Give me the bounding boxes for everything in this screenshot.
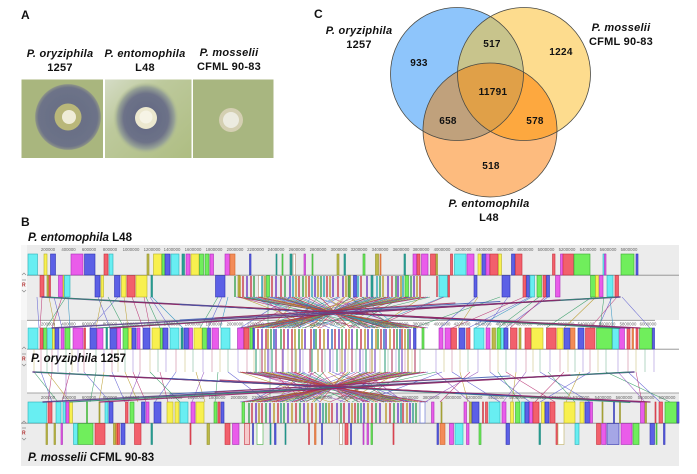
track icons: R <box>22 356 26 362</box>
heading: P. mosselii CFML 90-83: P. mosselii <box>200 47 259 59</box>
Venn counts: 658 <box>439 116 457 127</box>
heading: P. entomophila L48: P. entomophila <box>105 48 185 60</box>
track 3 ruler: 3800000 <box>423 395 440 400</box>
track 3 ruler: 3400000 <box>381 395 398 400</box>
track 1 ruler: 3800000 <box>413 247 430 252</box>
track 3 forward blocks <box>28 402 679 423</box>
track 3 narrow blocks <box>249 403 416 423</box>
track 2 ruler: 5200000 <box>558 322 575 326</box>
track 1 ruler: 600000 <box>82 247 97 252</box>
track 1 ruler: 2000000 <box>227 247 244 252</box>
track 2 ruler: 6000000 <box>640 322 657 326</box>
track 3 ruler: 4400000 <box>488 395 505 400</box>
Venn label: P. oryziphila 1257: 1257 <box>346 39 372 51</box>
panel label C: C <box>314 7 323 21</box>
track 2 ruler: 3600000 <box>392 322 409 326</box>
label: P. mosselii CFML 90-83: P. mosselii CFML 90-83 <box>28 452 154 464</box>
track 1 ruler: 5000000 <box>538 247 555 252</box>
track 3 ruler: 2800000 <box>316 395 333 400</box>
track 3 ruler: 2000000 <box>231 395 248 400</box>
track 2 ruler: 1200000 <box>144 322 161 326</box>
track 2 ruler: 1800000 <box>206 322 223 326</box>
track 1 ruler: 4600000 <box>497 247 514 252</box>
track 1 ruler: 1800000 <box>206 247 223 252</box>
track 3 ruler: 1000000 <box>123 395 140 400</box>
track 2 ruler: 5000000 <box>537 322 554 326</box>
track 2 narrow blocks <box>258 329 410 349</box>
track 2 ruler: 600000 <box>82 322 97 326</box>
track 3 ruler: 4600000 <box>509 395 526 400</box>
link bundles between tracks 2 and 3 <box>33 372 650 402</box>
label: P. oryziphila 1257: P. oryziphila 1257 <box>31 353 126 365</box>
track icons: R <box>22 282 26 288</box>
track icons <box>22 273 26 440</box>
track 2 ruler: 4200000 <box>454 322 471 326</box>
track 2 pale link lines <box>34 349 654 372</box>
track 1 ruler: 1600000 <box>185 247 202 252</box>
track 2 ruler: 2000000 <box>227 322 244 326</box>
track 2 ruler: 1400000 <box>164 322 181 326</box>
track 3 ruler: 4200000 <box>466 395 483 400</box>
track 1 ruler: 4800000 <box>517 247 534 252</box>
track 1 ruler: 3600000 <box>393 247 410 252</box>
track 3 ruler: 1600000 <box>188 395 205 400</box>
plate: P. mosselii <box>193 80 274 158</box>
track 1 ruler: 3400000 <box>372 247 389 252</box>
track 1 ruler: 5800000 <box>621 247 638 252</box>
track 3 ruler: 5800000 <box>638 395 655 400</box>
track 2 ruler: 4400000 <box>475 322 492 326</box>
track 3 ruler: 1400000 <box>166 395 183 400</box>
track 2 ruler: 1600000 <box>185 322 202 326</box>
track 2 ruler: 2800000 <box>310 322 327 326</box>
track 2 darker central strips <box>256 349 415 372</box>
track 3 ruler: 3000000 <box>338 395 355 400</box>
track 2 ruler: 4600000 <box>496 322 513 326</box>
track 1 ruler: 1200000 <box>144 247 161 252</box>
track 2 blocks <box>28 328 654 349</box>
track 1 forward blocks <box>28 254 638 275</box>
panel label B: B <box>21 215 30 229</box>
Venn counts: 1224 <box>549 47 573 58</box>
panel label A: A <box>21 8 30 22</box>
Venn label: P. mosselii CFML 90-83: P. mosselii <box>592 22 651 34</box>
panel C: Venn diagram <box>326 8 653 224</box>
track 3 ruler: 5000000 <box>552 395 569 400</box>
track 2 ruler: 2200000 <box>247 322 264 326</box>
track 1 ruler: 4400000 <box>476 247 493 252</box>
track 1 ruler: 2200000 <box>247 247 264 252</box>
Venn counts: 11791 <box>479 87 508 98</box>
Venn counts: 517 <box>483 39 501 50</box>
Venn counts: 518 <box>482 161 500 172</box>
track 2 ruler: 5800000 <box>620 322 637 326</box>
track 1 narrow reverse blocks <box>235 276 437 297</box>
heading: P. oryziphila 1257: P. oryziphila <box>27 48 93 60</box>
link bundles between tracks 1 and 2 <box>42 297 640 328</box>
track 1 ruler: 3200000 <box>351 247 368 252</box>
track 3 ruler: 3600000 <box>402 395 419 400</box>
panel A: inhibition zone plates <box>22 47 274 158</box>
link lines between tracks 1 and 2 <box>37 297 650 328</box>
Venn label: P. entomophila L48: P. entomophila <box>449 198 529 210</box>
track 1 reverse blocks <box>40 276 618 297</box>
plate: P. entomophila <box>105 80 192 158</box>
track 3 ruler: 2600000 <box>295 395 312 400</box>
Venn label: P. entomophila L48: L48 <box>479 212 499 224</box>
track 3 ruler: 2400000 <box>273 395 290 400</box>
track 1 ruler: 200000 <box>41 247 56 252</box>
track 1 ruler: 3000000 <box>331 247 348 252</box>
track 2 ruler: 1000000 <box>123 322 140 326</box>
track 3 ruler: 5600000 <box>616 395 633 400</box>
track 2 ruler: 3000000 <box>330 322 347 326</box>
Venn label: P. mosselii CFML 90-83: CFML 90-83 <box>589 36 653 48</box>
track 2 ruler: 5400000 <box>578 322 595 326</box>
track 1 ruler: 5400000 <box>580 247 597 252</box>
track 2 ruler: 800000 <box>103 322 118 326</box>
Venn label: P. oryziphila 1257: P. oryziphila <box>326 25 392 37</box>
track 3 ruler: 3200000 <box>359 395 376 400</box>
track 2 ruler: 5600000 <box>599 322 616 326</box>
track 3 ruler: 4000000 <box>445 395 462 400</box>
panel B: genome alignment <box>21 232 679 466</box>
track 3 ruler: 800000 <box>103 395 118 400</box>
alignment background tracks <box>21 245 679 466</box>
track 1 ruler: 2400000 <box>268 247 285 252</box>
Venn counts: 933 <box>410 58 428 69</box>
track 2 ruler: 3200000 <box>351 322 368 326</box>
track 1 ruler: 400000 <box>61 247 76 252</box>
track 2 ruler: 200000 <box>41 322 56 326</box>
track 1 ruler: 1000000 <box>123 247 140 252</box>
track 1 ruler: 4200000 <box>455 247 472 252</box>
track 3 ruler: 200000 <box>41 395 56 400</box>
plate: P. oryziphila <box>22 80 103 158</box>
track 1 ruler: 2800000 <box>310 247 327 252</box>
track 1 ruler: 5600000 <box>600 247 617 252</box>
track 3 ruler: 1800000 <box>209 395 226 400</box>
heading: P. mosselii CFML 90-83: CFML 90-83 <box>197 61 261 73</box>
link lines between tracks 2 and 3 <box>34 372 670 402</box>
track 3 ruler: 600000 <box>82 395 97 400</box>
track 1 ruler: 5200000 <box>559 247 576 252</box>
track 3 ruler: 4800000 <box>530 395 547 400</box>
Venn counts: 578 <box>526 116 544 127</box>
track 2 ruler: 3400000 <box>372 322 389 326</box>
track 1 ruler: 800000 <box>103 247 118 252</box>
track 2 ruler: 2400000 <box>268 322 285 326</box>
label: P. entomophila L48: P. entomophila L48 <box>28 232 133 244</box>
track 1 ruler: 4000000 <box>434 247 451 252</box>
track 3 ruler: 5400000 <box>595 395 612 400</box>
track 1 ruler: 1400000 <box>164 247 181 252</box>
track 3 ruler: 2200000 <box>252 395 269 400</box>
track 2 ruler: 4000000 <box>434 322 451 326</box>
heading: P. entomophila L48: L48 <box>135 62 155 74</box>
track 1 ruler: 2600000 <box>289 247 306 252</box>
track icons: R <box>22 430 26 436</box>
track 3 ruler: 5200000 <box>573 395 590 400</box>
track 3 ruler: 400000 <box>62 395 77 400</box>
track 2 ruler: 3800000 <box>413 322 430 326</box>
track 3 ruler: 6000000 <box>659 395 676 400</box>
track 3 reverse blocks <box>46 424 665 444</box>
track 2 ruler: 4800000 <box>516 322 533 326</box>
track 2 ruler: 400000 <box>61 322 76 326</box>
track 3 ruler: 1200000 <box>145 395 162 400</box>
track 2 ruler: 2600000 <box>289 322 306 326</box>
heading: P. oryziphila 1257: 1257 <box>47 62 73 74</box>
